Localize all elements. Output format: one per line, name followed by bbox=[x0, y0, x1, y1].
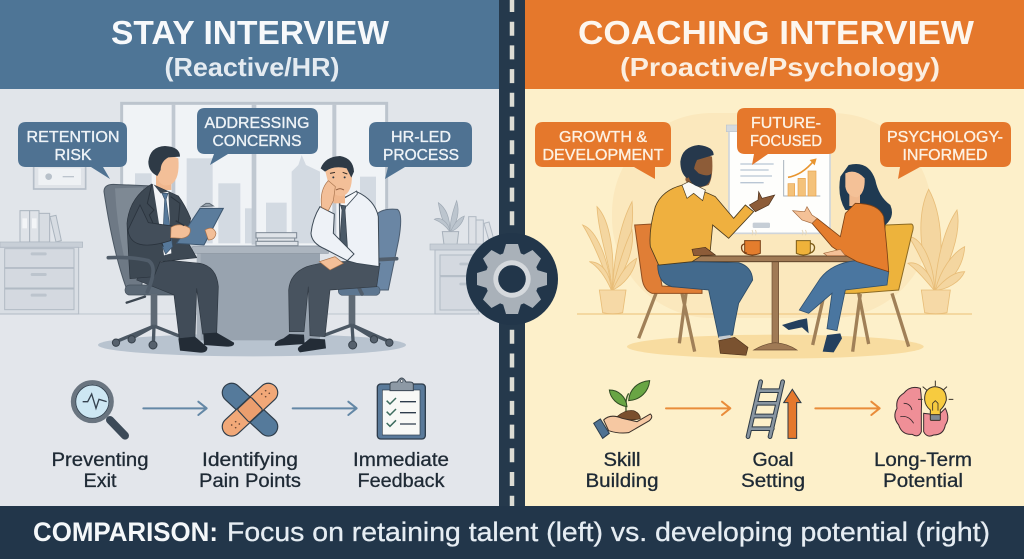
desk with papers bbox=[193, 233, 328, 341]
callout: addressing concerns: ADDRESSING bbox=[204, 115, 310, 132]
label: preventing exit: Exit bbox=[84, 471, 117, 492]
callout: growth and development: GROWTH & bbox=[559, 129, 647, 146]
process row: stay interview bbox=[52, 378, 449, 492]
illustration: coaching scene at cafe table bbox=[583, 125, 965, 359]
table with cups bbox=[693, 230, 856, 350]
callout: growth and development: DEVELOPMENT bbox=[542, 147, 664, 164]
yellow chair bbox=[813, 224, 913, 352]
label: identifying pain points: Pain Points bbox=[199, 471, 301, 492]
icon: hand holding seedling bbox=[594, 381, 652, 438]
arrow bbox=[293, 402, 357, 415]
header: stay interview bbox=[0, 0, 499, 89]
icon: ladder with up arrow bbox=[748, 382, 801, 438]
illustration: office scene with HR interviewer and stressed employee bbox=[0, 103, 494, 356]
title: coaching interview: COACHING INTERVIEW bbox=[578, 14, 975, 51]
callout: growth and development bbox=[535, 122, 671, 179]
callout: addressing concerns bbox=[197, 108, 318, 165]
label: goal setting bbox=[741, 450, 805, 492]
callout: psychology-informed: PSYCHOLOGY- bbox=[887, 129, 1003, 146]
header: coaching interview bbox=[525, 0, 1024, 89]
wall certificate bbox=[34, 165, 86, 189]
arrow bbox=[666, 402, 730, 415]
comparison statement: Focus on retaining talent (left) vs. developing potential (right) bbox=[227, 517, 990, 547]
floor shadow bbox=[98, 334, 406, 356]
office window with skyline bbox=[122, 103, 387, 247]
stressed employee bbox=[275, 156, 380, 352]
right plant and cabinet bbox=[430, 201, 494, 314]
label: immediate feedback: Feedback bbox=[358, 471, 445, 492]
callout: addressing concerns: CONCERNS bbox=[212, 133, 302, 150]
coach in yellow sweater bbox=[650, 145, 775, 355]
divider with dashes bbox=[499, 0, 525, 506]
panel: stay interview background bbox=[0, 0, 499, 506]
label: skill building bbox=[586, 450, 658, 492]
label: immediate feedback: Immediate bbox=[353, 450, 449, 471]
comparison label: COMPARISON: bbox=[33, 517, 218, 547]
label: preventing exit: Preventing bbox=[52, 450, 148, 471]
right chair bbox=[325, 209, 401, 349]
callout: future-focused: FUTURE- bbox=[751, 115, 821, 132]
callout: retention risk: RETENTION bbox=[26, 129, 120, 146]
callout: HR-led process: HR-LED bbox=[391, 129, 451, 146]
left potted plant bbox=[583, 202, 637, 314]
arrow bbox=[143, 402, 207, 415]
label: skill building: Building bbox=[586, 471, 658, 492]
label: identifying pain points bbox=[199, 450, 301, 492]
orange chair bbox=[635, 224, 702, 352]
label: long-term potential: Long-Term bbox=[874, 450, 972, 471]
label: long-term potential: Potential bbox=[883, 471, 963, 492]
label: preventing exit bbox=[52, 450, 148, 492]
icon: magnifying glass with pulse bbox=[73, 382, 125, 436]
callout: future-focused: FOCUSED bbox=[750, 133, 822, 150]
callout: retention risk: RISK bbox=[54, 147, 92, 164]
icon: checklist clipboard bbox=[377, 378, 425, 439]
callout: future-focused bbox=[737, 108, 836, 165]
client in orange sweater bbox=[782, 164, 892, 352]
HR interviewer with clipboard bbox=[108, 146, 234, 353]
label: identifying pain points: Identifying bbox=[202, 450, 298, 471]
label: goal setting: Goal bbox=[752, 450, 794, 471]
label: long-term potential bbox=[874, 450, 972, 492]
icon: crossed bandages bbox=[231, 390, 270, 428]
arrow bbox=[815, 402, 880, 415]
label: immediate feedback bbox=[353, 450, 449, 492]
process row: coaching interview bbox=[586, 381, 972, 492]
bottom comparison bar bbox=[0, 506, 1024, 559]
subtitle: proactive/psychology: (Proactive/Psychology) bbox=[620, 52, 940, 82]
label: skill building: Skill bbox=[604, 450, 640, 471]
floor shadow bbox=[627, 335, 924, 359]
icon: brain with lightbulb bbox=[895, 381, 953, 436]
icon: central gear bbox=[466, 233, 558, 325]
callout: HR-led process: PROCESS bbox=[383, 147, 459, 164]
callout: HR-led process bbox=[369, 122, 472, 179]
title: stay interview: STAY INTERVIEW bbox=[111, 14, 390, 51]
callout: psychology-informed bbox=[880, 122, 1011, 179]
left chair bbox=[104, 184, 189, 349]
panel: coaching interview background bbox=[525, 0, 1024, 506]
callout: retention risk bbox=[18, 122, 127, 179]
subtitle: reactive/HR: (Reactive/HR) bbox=[164, 52, 340, 82]
right potted plant bbox=[908, 189, 965, 314]
left binders and cabinet bbox=[0, 211, 83, 314]
callout: psychology-informed: INFORMED bbox=[902, 147, 988, 164]
label: goal setting: Setting bbox=[741, 471, 805, 492]
whiteboard with growth chart bbox=[726, 125, 833, 233]
